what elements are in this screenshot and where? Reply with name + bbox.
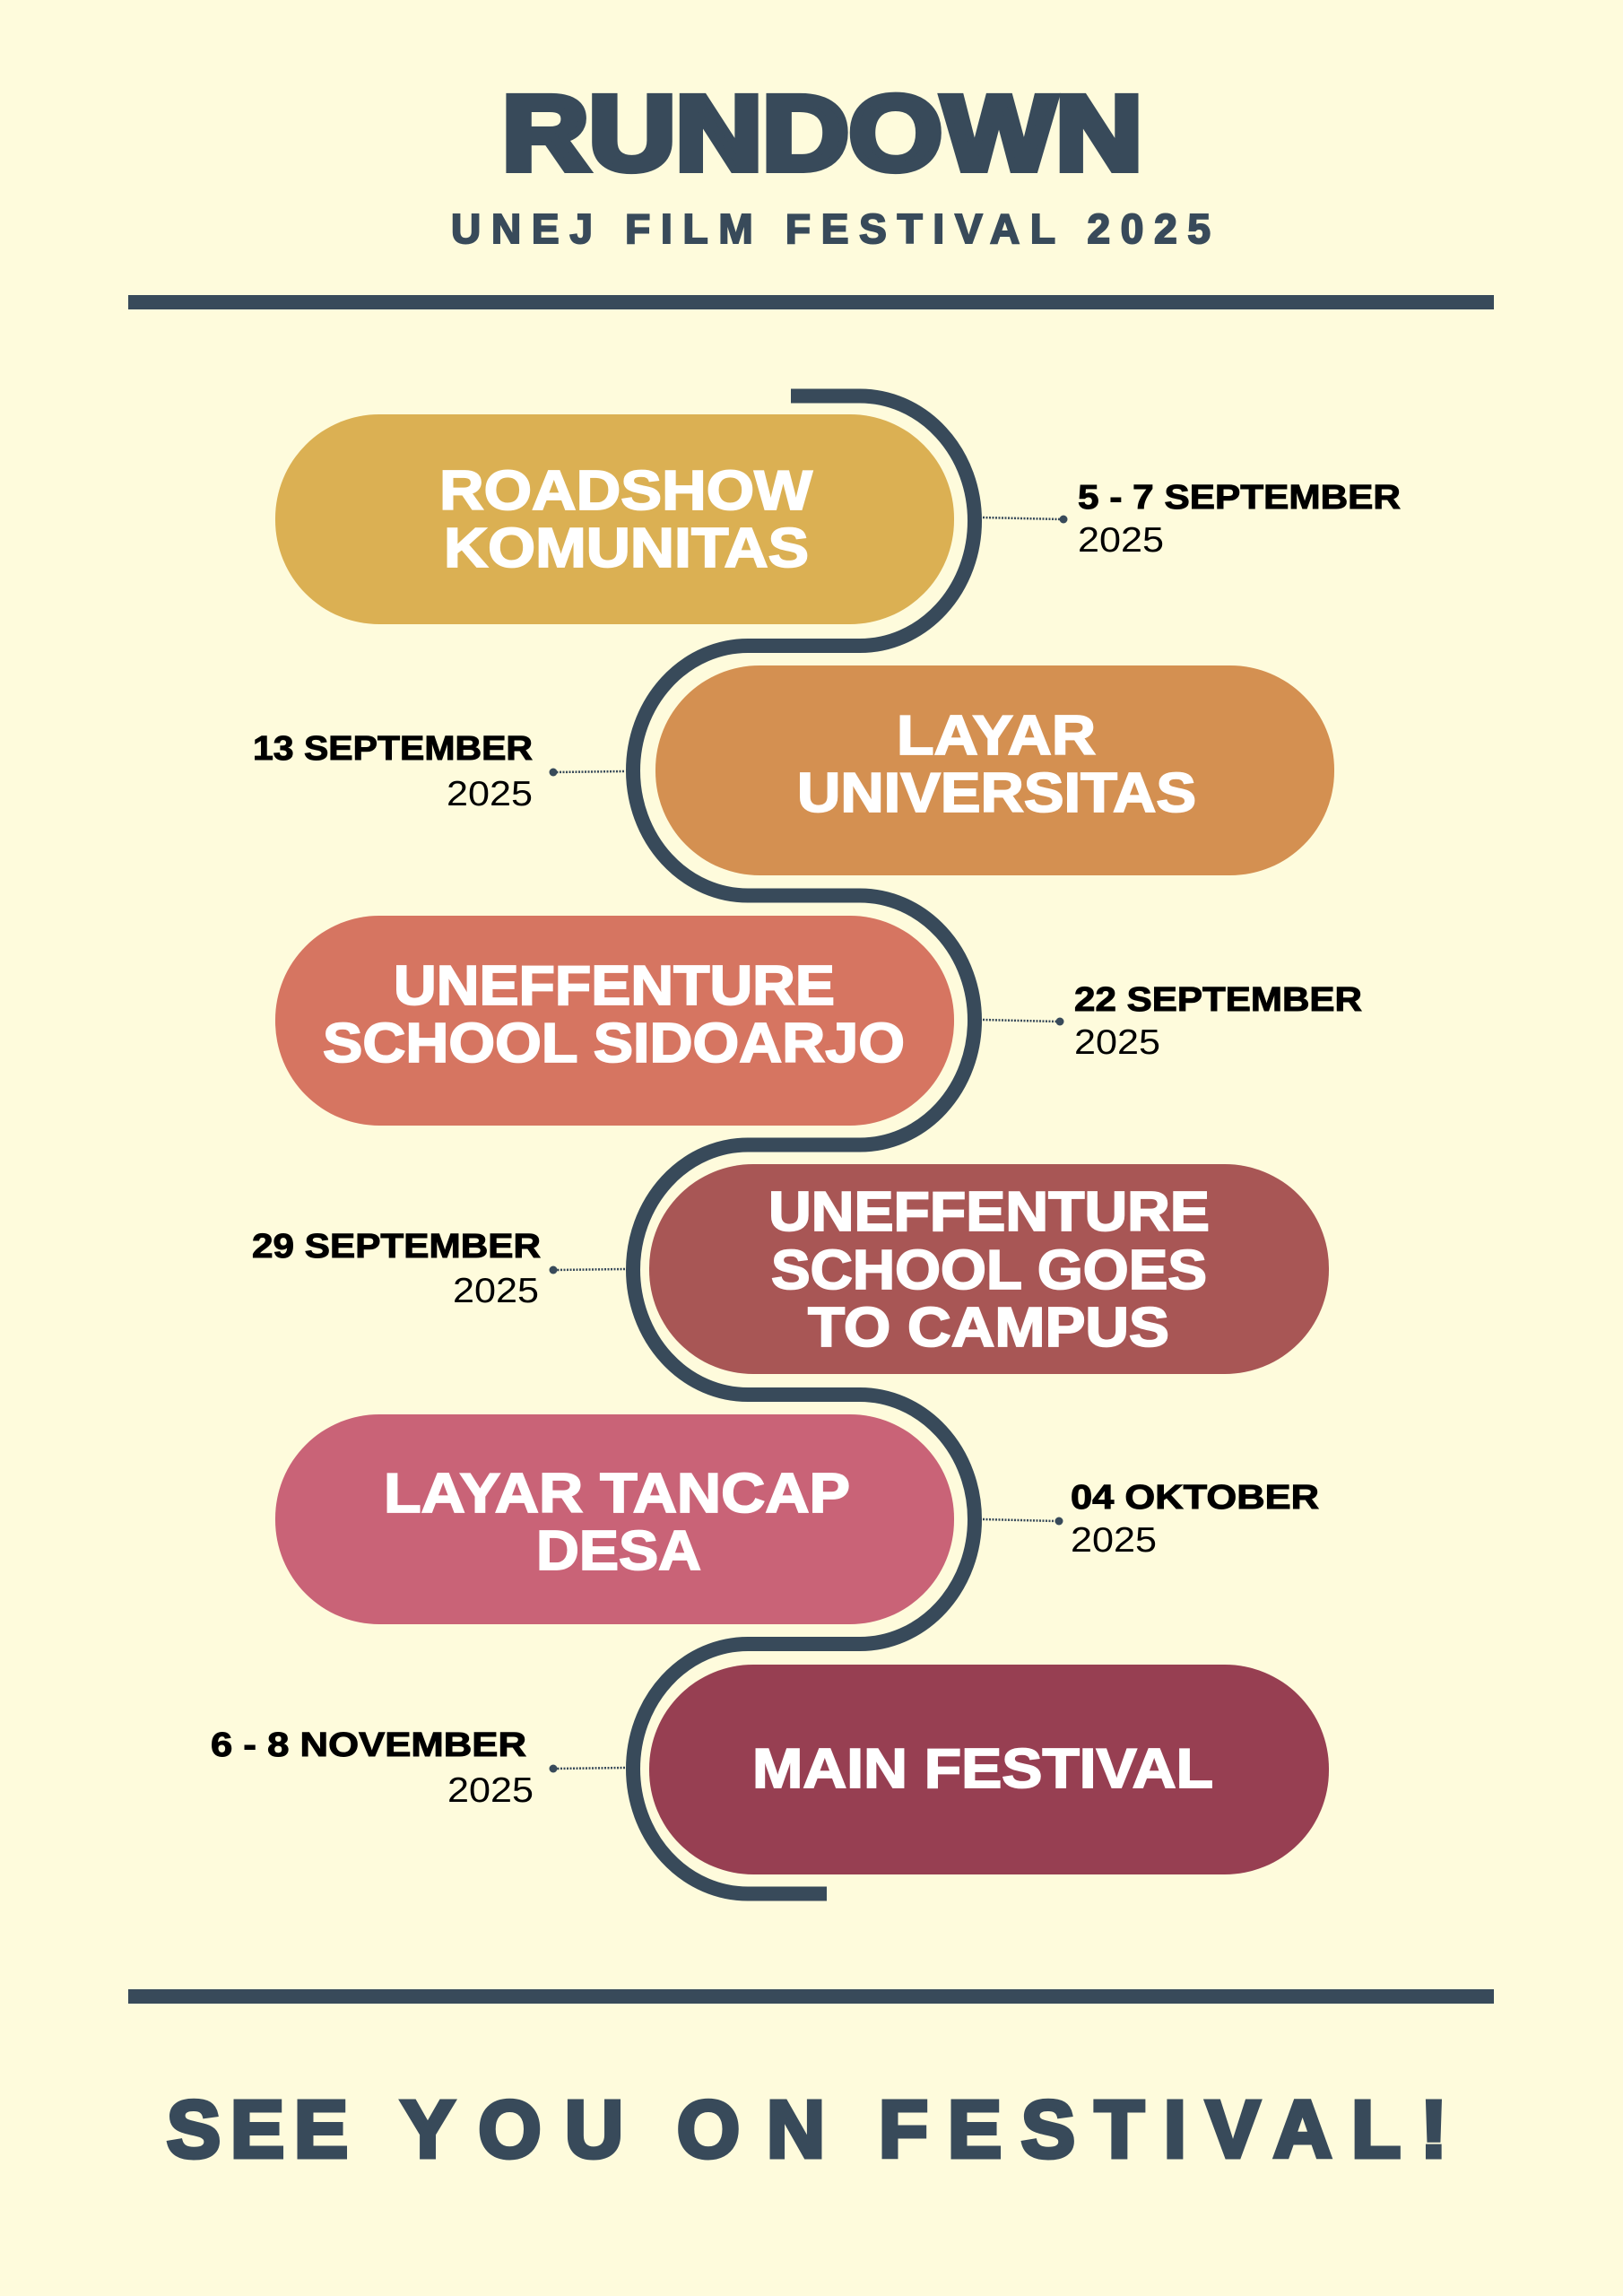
panel: Layar Universitas: [655, 665, 1334, 875]
subtitle: UNEJ FILM FESTIVAL 2025: [451, 205, 1211, 252]
date: 6 - 8 November: 2025: [447, 1771, 534, 1810]
date: 04 Oktober: 04 OKTOBER: [1071, 1479, 1319, 1517]
date: 22 September: 2025: [1074, 1023, 1160, 1062]
pill label: LAYAR: [897, 705, 1096, 767]
pill label: MAIN FESTIVAL: [752, 1738, 1213, 1800]
date: 13 September: 13 SEPTEMBER: [253, 730, 533, 768]
panel: Uneffenture School Goes To Campus: [649, 1164, 1329, 1374]
date: 5 - 7 September: [1078, 479, 1401, 560]
date: 6 - 8 November: [211, 1726, 534, 1810]
panel: Roadshow Komunitas: [275, 414, 954, 624]
pill label: UNEFFENTURE: [394, 955, 835, 1017]
footer message: [167, 2085, 1447, 2175]
footer message: ON: [677, 2085, 825, 2175]
pill label: [323, 955, 905, 1074]
winding timeline path: [633, 396, 975, 1894]
connector: third date: [983, 1017, 1063, 1026]
connector: first date: [983, 515, 1067, 524]
date: 22 September: 22 SEPTEMBER: [1074, 981, 1362, 1019]
pill label: ROADSHOW: [439, 460, 813, 522]
pill: [275, 1414, 954, 1624]
footer message: SEE: [167, 2085, 348, 2175]
pill: [649, 1164, 1329, 1374]
connector: second date: [549, 768, 624, 777]
footer message: FESTIVAL!: [879, 2085, 1447, 2175]
date: 6 - 8 November: 6 - 8 NOVEMBER: [211, 1726, 526, 1764]
date: 5 - 7 September: 5 - 7 SEPTEMBER: [1078, 479, 1401, 517]
date: 29 September: 29 SEPTEMBER: [252, 1228, 541, 1265]
pill label: LAYAR TANCAP: [384, 1463, 850, 1525]
date: 5 - 7 September: 2025: [1078, 521, 1164, 560]
connector: sixth date: [549, 1765, 625, 1772]
date: 13 September: 2025: [447, 775, 533, 813]
date: 04 Oktober: [1071, 1479, 1319, 1560]
pill label: SCHOOL SIDOARJO: [323, 1013, 905, 1074]
pill label: KOMUNITAS: [444, 517, 809, 579]
bottom divider bar: [128, 1989, 1494, 2004]
pill: [649, 1665, 1329, 1874]
pill label: TO CAMPUS: [808, 1297, 1169, 1359]
connector: fifth date: [983, 1518, 1063, 1525]
date: 04 Oktober: 2025: [1071, 1521, 1157, 1560]
date: 22 September: [1074, 981, 1362, 1062]
title: RUNDOWN: [502, 74, 1142, 193]
panel: Uneffenture School Sidoarjo: [275, 916, 954, 1126]
date: 29 September: [252, 1228, 541, 1310]
pill label: [439, 460, 813, 579]
panel: Layar Tancap Desa: [275, 1414, 954, 1624]
panel: Main Festival: [649, 1665, 1329, 1874]
date: 29 September: 2025: [453, 1272, 539, 1310]
pill: [655, 665, 1334, 875]
pill label: DESA: [536, 1520, 701, 1582]
pill: [275, 414, 954, 624]
pill label: [768, 1181, 1210, 1359]
pill: [275, 916, 954, 1126]
date: 13 September: [253, 730, 533, 813]
pill label: [797, 705, 1196, 824]
pill label: [384, 1463, 850, 1582]
pill label: SCHOOL GOES: [771, 1239, 1207, 1301]
footer message: YOU: [401, 2085, 623, 2175]
top divider bar: [128, 295, 1494, 309]
connector: fourth date: [549, 1266, 625, 1274]
pill label: UNEFFENTURE: [768, 1181, 1210, 1243]
pill label: UNIVERSITAS: [797, 762, 1196, 824]
